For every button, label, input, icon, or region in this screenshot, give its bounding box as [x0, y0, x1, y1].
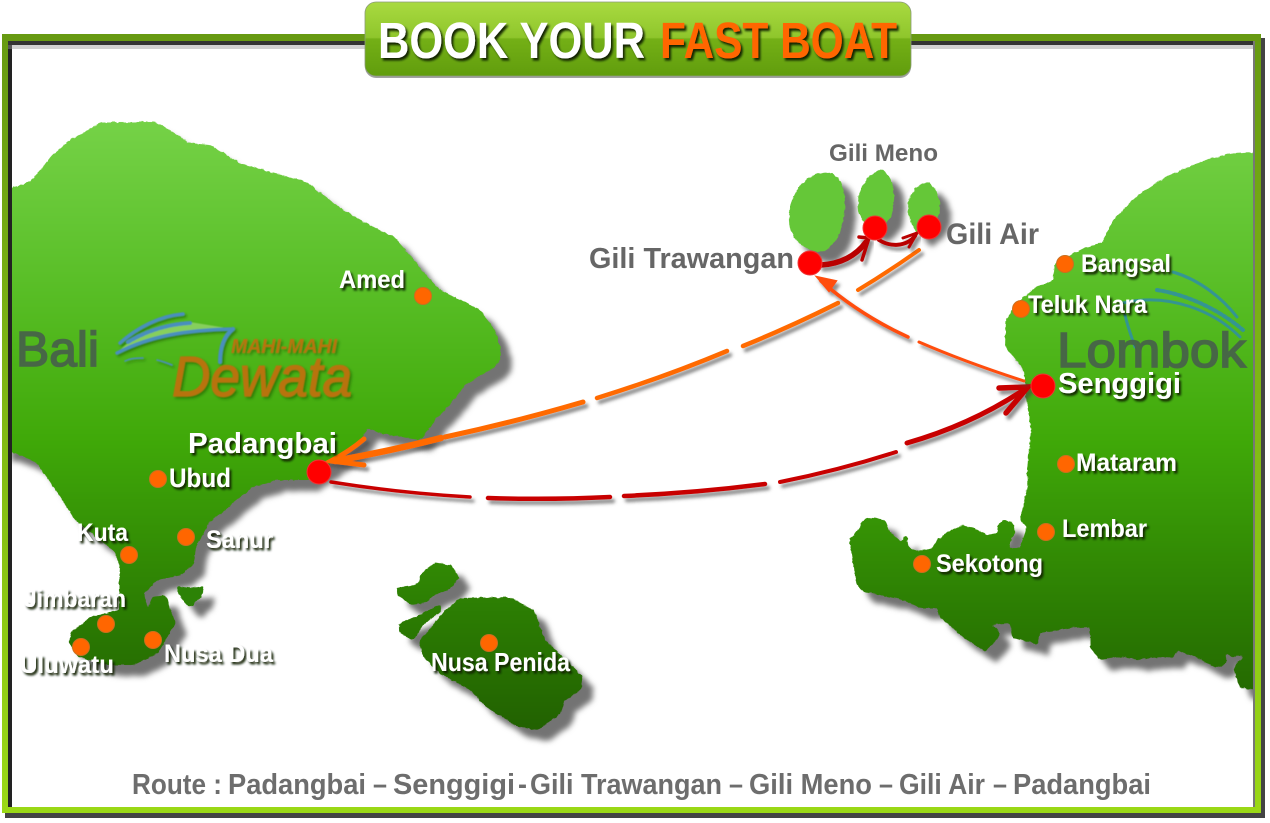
- white place labels: Nusa Penida: [431, 647, 570, 677]
- white place labels: Bangsal: [1081, 250, 1171, 278]
- white place labels: Jimbaran: [24, 585, 126, 613]
- island: Gili Air: [908, 182, 940, 236]
- island: Bali: [0, 122, 501, 665]
- route caption: -: [518, 769, 527, 801]
- route caption: –: [879, 769, 893, 801]
- white place labels: Mataram: [1076, 449, 1177, 477]
- harbour markers: [307, 215, 1055, 484]
- island: Gili Trawangan: [789, 172, 845, 252]
- white place labels: Padangbai: [188, 428, 337, 460]
- route caption: –: [993, 769, 1007, 801]
- white place labels: Ubud: [169, 463, 231, 493]
- white place labels: Amed: [339, 266, 405, 294]
- arrow: Senggigi to Gili Trawangan: [817, 277, 1024, 381]
- arrow: Gili Trawangan to Gili Meno: [821, 237, 869, 265]
- route caption: [132, 769, 1151, 801]
- white place labels: Kuta: [77, 519, 129, 547]
- logo: Mahi-Mahi Dewata: [117, 314, 352, 409]
- route caption: Gili Trawangan: [530, 769, 722, 801]
- Bali watermark: Bali: [16, 323, 99, 377]
- island: Gili Meno: [858, 169, 894, 232]
- route caption: Route :: [132, 769, 222, 801]
- island: Nusa Lembongan: [397, 563, 460, 605]
- Dewata wordmark: Dewata: [172, 345, 352, 409]
- map of islands: [0, 122, 1270, 730]
- route caption: Gili Meno: [749, 769, 872, 801]
- boat icon: [117, 314, 233, 365]
- route caption: Senggigi: [393, 769, 515, 801]
- Lombok watermark: Lombok: [1057, 324, 1247, 378]
- town markers: [72, 256, 1074, 656]
- Lombok watermark boat: [1123, 272, 1243, 347]
- route caption: Gili Air: [899, 769, 985, 801]
- island: Nusa Penida: [419, 597, 583, 730]
- white place labels: Teluk Nara: [1028, 291, 1148, 319]
- grey Gili labels: Gili Air: [946, 218, 1039, 251]
- route caption: Padangbai: [1013, 769, 1151, 801]
- route caption: –: [373, 769, 387, 801]
- title text: [378, 12, 897, 69]
- route caption: –: [729, 769, 743, 801]
- title banner: [365, 2, 911, 78]
- Mahi-Mahi wordmark: MAHI-MAHI: [231, 336, 337, 358]
- arrow: Gili Meno to Gili Air: [879, 233, 917, 247]
- title text: BOOK YOUR: [378, 12, 645, 69]
- white place labels: Sekotong: [936, 550, 1043, 578]
- island: Nusa Ceningan: [399, 604, 441, 640]
- white place labels: Lembar: [1062, 515, 1147, 543]
- grey Gili labels: Gili Meno: [829, 140, 938, 167]
- grey Gili labels: [589, 140, 1039, 275]
- island: Serangan: [176, 585, 205, 608]
- arrow: Gili Air to Padangbai: [331, 250, 919, 465]
- white place labels: [20, 250, 1181, 679]
- title text: FAST BOAT: [660, 12, 897, 69]
- white place labels: Uluwatu: [20, 651, 114, 679]
- white place labels: Sanur: [206, 526, 273, 554]
- arrow: Padangbai to Senggigi: [331, 387, 1028, 499]
- route caption: Padangbai: [228, 769, 366, 801]
- grey Gili labels: Gili Trawangan: [589, 243, 794, 275]
- white place labels: Nusa Dua: [164, 640, 274, 668]
- island: Lombok: [849, 150, 1270, 692]
- white place labels: Senggigi: [1058, 368, 1181, 400]
